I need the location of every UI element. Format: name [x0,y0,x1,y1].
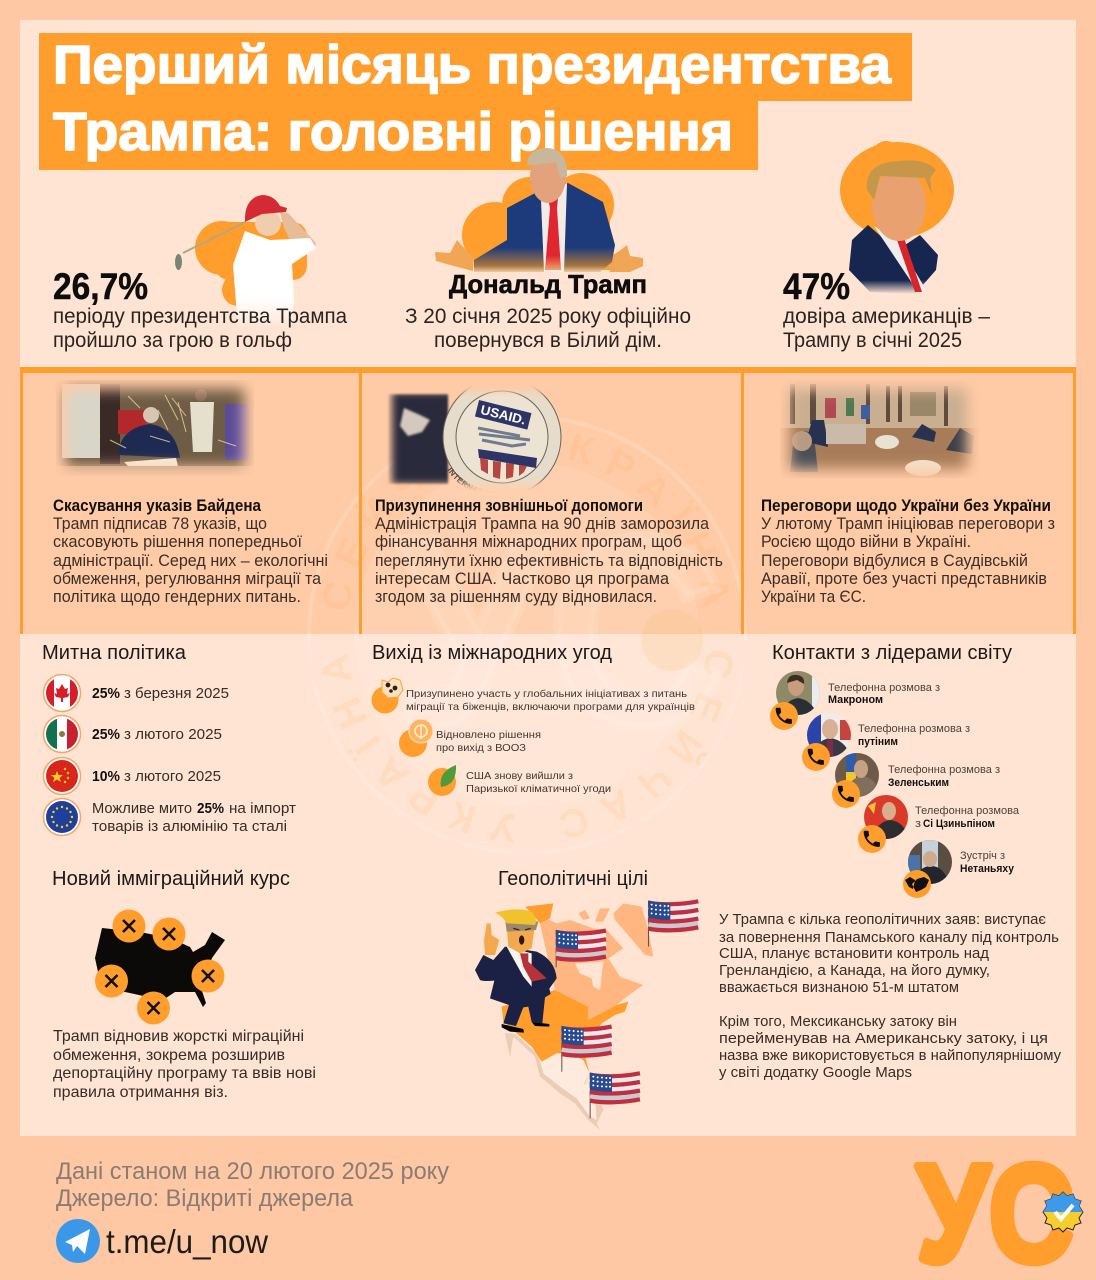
text: migration: Призупинено участь у глобальних ініціативах з питань [406,688,688,700]
stat: trust: довіра американців – [783,305,990,328]
text: EU tariff [92,800,296,835]
text: geopolitical claims: вважається визнаною 51-м штатом [719,980,959,996]
section: geopolitical goals [475,868,1062,1130]
card: talks on Ukraine: України та ЄС. [761,588,866,606]
watermark logo: УКРАЇНА СЕЙЧАС УКРАЇНА СЕЙЧАС [322,433,732,842]
icon: Telegram [56,1219,100,1263]
icon: migration organisation [372,678,403,714]
text: Mexico tariff: 25% [92,726,120,743]
flag: Greenland [648,901,698,947]
heading: immigration: Новий імміграційний курс [52,868,290,890]
card: talks on Ukraine: Переговори відбулися в Саудівській [761,552,1028,570]
text: Netanyahu: Нетаньяху [960,863,1015,875]
title: Перший місяць президентства [53,35,892,95]
text: Gulf of America: назва вже використовується в найпопулярнішому [719,1048,1062,1064]
photo: USAID seal: INTERNATIONAL [448,467,484,490]
text: Xi: Телефонна розмова [915,805,1020,817]
icon: WHO [399,719,433,757]
text: geopolitical claims: Гренландією, а Канада, на його думку, [719,963,990,979]
heading: tariffs: Митна політика [42,642,187,664]
watermark logo: УС [395,482,725,783]
text: Xi: з [915,818,921,830]
map: USA [502,903,628,1073]
icon: USA map [95,928,225,1007]
card: Biden decrees: адміністрації. Серед них – екологічні [53,552,328,570]
intro: Donald Trump: Дональд Трамп [449,269,647,299]
flag: Canada [44,674,80,712]
text: China tariff: 10% [92,768,120,785]
card: foreign aid: Призупинення зовнішньої допомоги [375,497,643,515]
card: talks on Ukraine [761,497,1055,606]
illustration: Trump in centre [435,148,643,272]
stat: trust: Трампу в січні 2025 [783,329,962,352]
flag: Mexico [590,1073,640,1118]
text: EU tariff: товарів із алюмінію та сталі [92,819,287,835]
flag: USA [561,1026,612,1072]
text: Netanyahu: Зустріч з [960,850,1005,862]
text: Zelensky [888,764,1000,789]
text: WHO: Відновлено рішення [436,729,541,741]
text: immigration: депортаційну програму та ввів нові [53,1065,316,1082]
heading: agreements: Вихід із міжнародних угод [372,642,612,664]
text: Gulf of America [719,1014,1062,1081]
text: WHO [436,729,541,754]
text: geopolitical claims [719,912,1059,996]
text: Gulf of America: перейменував на Американську затоку, і ця [719,1031,1048,1047]
text: geopolitical claims: США, планує встановити контроль над [719,946,989,962]
text: WHO: про вихід з ВООЗ [436,742,526,754]
text: immigration: Трамп відновив жорсткі міграційні [53,1028,304,1045]
text: Macron [828,682,940,706]
footer: date and source [56,1158,449,1212]
text: geopolitical claims: У Трампа є кілька геополітичних заяв: виступає [719,912,1047,928]
footer: Telegram link: t.me/u_now [106,1223,268,1260]
text: migration [406,688,695,713]
flag: Mexico [44,716,80,752]
map: Hudson Bay [575,962,603,990]
card: foreign aid: Адміністрація Трампа на 90 днів заморозила [375,515,710,533]
photo: signing decrees [56,380,254,476]
photo: USAID seal [388,386,562,490]
text: Netanyahu [960,850,1015,875]
text: Putin: Телефонна розмова з [858,723,970,735]
text: Paris agreement: Паризької кліматичної угоди [466,783,611,795]
illustration: cartoon Trump [475,909,557,1033]
portrait: Netanyahu [903,840,952,898]
stat: golf [53,266,347,352]
photo: talks in Saudi Arabia [780,380,980,478]
text: Macron: Макроном [828,694,883,706]
decisions band background [20,367,1076,634]
flag: China [44,758,80,794]
portrait: Zelensky [832,753,880,808]
title: Трампа: головні рішення [53,102,733,162]
card: Biden decrees: Скасування указів Байдена [53,497,262,515]
portrait: Xi [858,795,908,853]
text: migration: міграції та біженців, включаючи програми для українців [406,701,695,713]
card: foreign aid: згодом за рішенням суду відновилася. [375,588,657,606]
icon: leaf [428,765,456,796]
text: Mexico tariff: з лютого 2025 [124,727,222,743]
icon: crossed circles [95,910,224,1024]
map: Greenland and islands [578,903,653,957]
card: foreign aid [375,497,723,606]
flag: Canada [556,930,606,967]
text: EU tariff: на імпорт [229,801,296,817]
card: talks on Ukraine: Переговори щодо України без України [761,497,1051,515]
text: Macron: Телефонна розмова з [828,682,940,694]
card: Biden decrees: Трамп підписав 78 указів, що [53,515,267,533]
footer: date and source: Джерело: Відкриті джерела [56,1185,354,1212]
text: immigration: обмеження, зокрема розширив [53,1047,285,1064]
text: Gulf of America: у світі додатку Google Maps [719,1065,912,1081]
text: immigration: правила отримання віз. [53,1084,228,1101]
footer: date and source: Дані станом на 20 лютого 2025 року [56,1158,449,1185]
text: Zelensky: Телефонна розмова з [888,764,1000,776]
text: Putin: путіним [858,736,898,748]
card: Biden decrees: політика щодо гендерних питань. [53,588,301,606]
text: Paris agreement: США знову вийшли з [466,770,573,782]
portrait: Macron [770,671,822,730]
heading: contacts: Контакти з лідерами світу [772,642,1012,664]
heading: geopolitics: Геополітичні цілі [498,868,648,890]
flag: EU [44,798,80,836]
card: foreign aid: фінансування міжнародних програм, щоб [375,533,682,551]
map: Mexico and Central America [505,1033,603,1130]
card: Biden decrees [53,497,328,606]
text: Putin [858,723,970,748]
text: Xi [915,805,1020,830]
card: foreign aid: інтересам США. Частково ця програма [375,570,670,588]
illustration: Trump portrait [840,141,954,294]
text: Xi: Сі Цзиньпіном [923,818,995,830]
map: North America with Trump and flags [475,901,698,1130]
text: Mexico tariff [92,726,222,743]
stat: golf: пройшло за грою в гольф [53,329,292,352]
stat: trust: 47% [783,266,850,307]
text: EU tariff: Можливе мито [92,801,192,817]
photo: USAID seal: USAID. [479,402,527,428]
card: Biden decrees: скасовують рішення попередньої [53,533,302,551]
intro: Donald Trump: З 20 січня 2025 року офіційно [405,305,691,328]
intro: Donald Trump: повернувся в Білий дім. [434,329,662,352]
band frame [20,367,1076,634]
text: Canada tariff: 25% [92,685,120,702]
portrait: Putin [802,713,852,771]
section: withdrawal from agreements [372,642,695,796]
text: EU tariff: 25% [197,800,224,817]
text: geopolitical claims: за повернення Панамського каналу під контроль [719,930,1059,946]
text: China tariff [92,768,221,785]
stat: golf: 26,7% [53,266,148,307]
stat: trust [783,266,990,352]
section: immigration [52,868,316,1101]
map: Canada [540,917,643,1020]
card: Biden decrees: обмеження, регулювання міграції та [53,570,322,588]
text: Gulf of America: Крім того, Мексиканську затоку він [719,1014,957,1030]
illustration: golfing Trump [175,195,316,328]
title [39,33,912,170]
card: talks on Ukraine: Аравії, проте без участі представників [761,570,1047,588]
text: Canada tariff: з березня 2025 [124,686,229,702]
text: Paris agreement [466,770,611,795]
section: tariffs [42,642,296,836]
stat: golf: періоду президентства Трампа [53,305,347,328]
intro: Donald Trump [405,269,691,352]
text: immigration [53,1028,316,1101]
card: foreign aid: переглянути їхню ефективність та відповідність [375,552,723,570]
section: contacts with leaders [770,642,1020,898]
card: talks on Ukraine: Росією щодо війни в Україні. [761,533,971,551]
text: China tariff: з лютого 2025 [124,769,221,785]
card: talks on Ukraine: У лютому Трамп ініціював переговори з [761,515,1055,533]
text: Zelensky: Зеленським [888,777,949,789]
